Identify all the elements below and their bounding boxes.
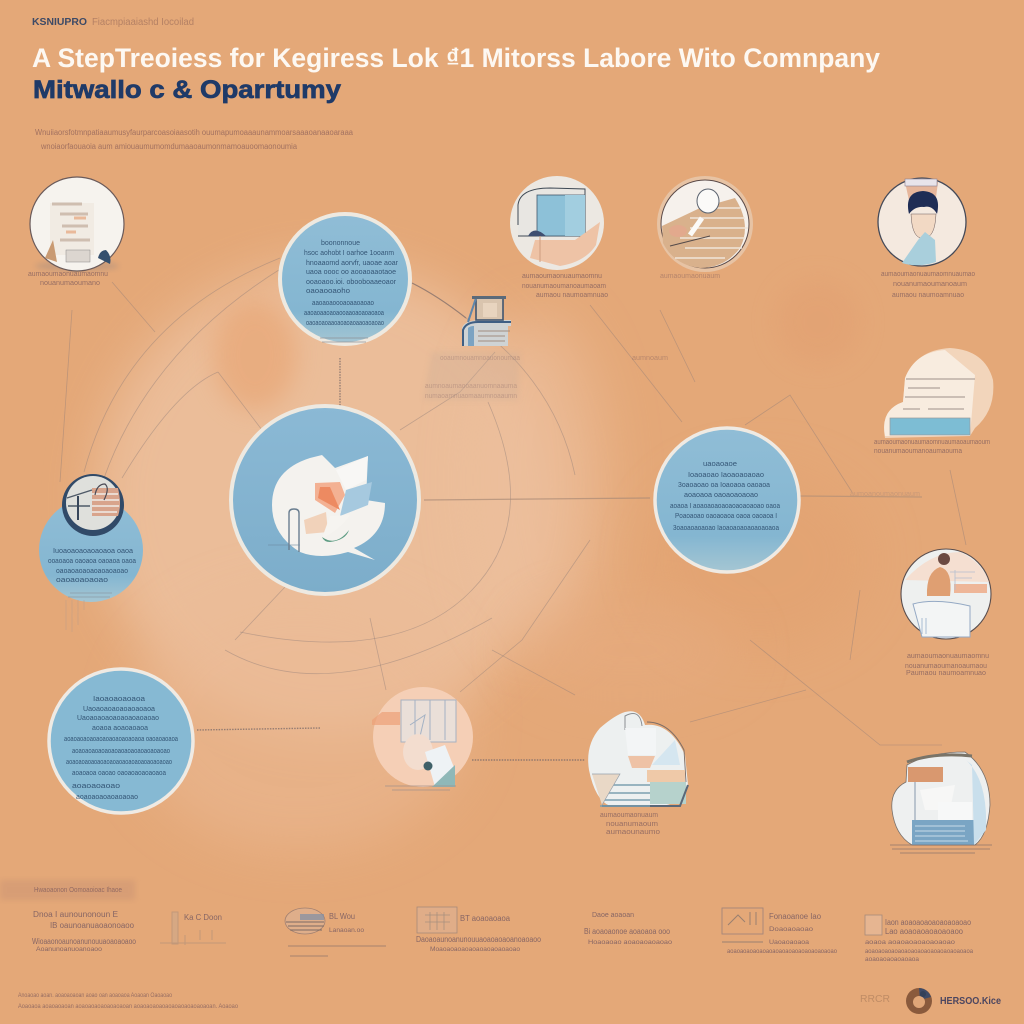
footer: brand logo <box>860 988 1001 1014</box>
icon: document with blue bar <box>884 348 993 438</box>
panel: lower-left text circle: aoaoaoa oaoao oaoaoaoaoaoaoa <box>72 770 166 777</box>
floating faint annotation text: numaoamnuaomaaumnoaaumn <box>425 393 517 400</box>
node caption: nouanumaoumano <box>40 280 100 287</box>
panel: monitor node <box>510 176 608 299</box>
caption: nouanumaoum <box>606 821 658 828</box>
icon: machine <box>462 296 511 346</box>
icon: abstract speech shape <box>268 455 385 560</box>
caption: nouanumaoumanoaumaoam <box>522 283 606 290</box>
panel: right text circle: uaoaoaoe <box>703 461 737 468</box>
caption <box>874 439 990 455</box>
panel: top text circle: hsoc aohobt I oarhoe 1ooanm <box>304 250 394 257</box>
floating faint annotation text: ooaumnouamnoauonoumaa <box>440 355 520 362</box>
footer: item 3: BL Wou <box>329 912 355 921</box>
title: A StepTreoiess for Kegiress Lok ₫1 Mitorss Labore Wito Comnpany <box>32 43 880 73</box>
footer: item 1: Dnoa I aunounonoun E <box>33 910 118 919</box>
panel: lower-left text circle: Uaoaoaoaoaoaoaoaoa <box>83 706 155 713</box>
icon: chart post <box>160 912 226 945</box>
footer: item 7: aoaoaoaoaoaoaoaoaoaoaoaoaoaoaoaoa <box>865 949 974 955</box>
panel: top text circle: boononnoue <box>321 240 360 247</box>
panel: top text circle: oaoaoaoaaoaoaoaoaaoaoaoao <box>306 320 384 327</box>
icon: portrait <box>878 178 966 266</box>
caption: aumaou naumoamnuao <box>892 292 964 299</box>
eyebrow label: Fiacmpiaaiashd Iocoilad <box>92 17 194 28</box>
caption: aumaoumaonuaumaomnu <box>522 273 602 280</box>
panel: left lock node with text circle: oaoaoaoaoaoaoaoaoao <box>56 568 128 575</box>
icon: globe stack <box>285 908 325 934</box>
footer: item 7: Lao aoaoaoaoaoaoaoo <box>885 927 964 936</box>
intro text: wnoiaorfaouaoia aum amiouaumumomdumaaoaumonmamoauoomaonoumia <box>40 142 298 151</box>
caption: nouanumaoumanoaum <box>893 281 967 288</box>
footer: item 4: BT aoaoaoaoa <box>460 914 511 923</box>
footer: item 1 <box>32 910 136 953</box>
caption: aumaoumaonuaumaomnu <box>907 653 989 660</box>
panel: lower-left text circle: aoaoaoaoaoaoaoaoaoaoaoaoa oaoaoaoaoa <box>64 736 178 743</box>
footer: item 6 <box>722 908 838 955</box>
panel: top-left illustrated node <box>28 177 124 287</box>
subtitle: Mitwallo c & Oparrtumy <box>33 76 341 104</box>
caption: aumaounaumo <box>606 829 660 836</box>
caption <box>905 653 989 677</box>
icon: sketched figure <box>657 176 753 272</box>
footer: item 4: Daoaoaunoanunouuaoaoaoaoanoaoaoo <box>416 935 541 944</box>
footer: item 5 <box>584 912 673 946</box>
caption <box>600 812 660 836</box>
caption: aumaoumaonuaum <box>600 812 658 819</box>
caption: Paumaou naumoamnuao <box>906 670 986 677</box>
footer: item 7: Iaon aoaoaoaoaoaoaoaoao <box>885 918 971 927</box>
panel: bottom-left-center reader node <box>372 687 473 790</box>
footer: brand logo: HERSOO.Kice <box>940 996 1001 1007</box>
footer: item 6: Uaoaoaoaoa <box>769 940 810 946</box>
background wash shapes <box>95 265 870 850</box>
icon: ship in frame <box>892 752 990 845</box>
caption <box>890 845 992 853</box>
footer: item 6: Fonaoanoe Iao <box>769 912 822 921</box>
panel: central hub <box>231 406 419 594</box>
footer: brand logo: RRCR <box>860 994 890 1005</box>
footer: item 1: IB oaunoanuaoaonoaoo <box>50 921 135 930</box>
footer: item 4 <box>416 907 541 953</box>
panel: bottom-center stacked node <box>588 711 688 836</box>
icon: monitor <box>510 176 604 270</box>
footer: item 1: Wioaaonoaunoanunouuaoaoaoaoo <box>32 937 136 946</box>
footer notes <box>18 993 239 1010</box>
panel: right text circle: 3oaoaoaoaoao Iaoaoaoaoaoaoaoaoa <box>673 525 779 532</box>
panel: right text circle <box>655 428 799 572</box>
panel: top text circle: aaoaoaaoaoaooaaoaoaoaoaoa <box>304 310 384 317</box>
floating faint annotation text: aumnoaumaooaanuomnaauma <box>425 383 517 390</box>
panel: lower-left text circle <box>49 669 193 813</box>
footer: item 5: Hoaoaoao aoaoaoaoaoao <box>588 940 673 946</box>
footer: item 7: aoaoa aoaoaoaoaoaoaoao <box>865 940 956 946</box>
panel: left lock node with text circle: oaoaoaoaoao <box>56 577 108 584</box>
panel: top text circle: oaoaooaoho <box>306 288 350 295</box>
connector lines <box>60 258 966 760</box>
icon: brand mark <box>906 988 932 1014</box>
footer: item 3 <box>285 908 386 956</box>
footer: item 2 <box>160 912 226 945</box>
caption: aumaoumaonuaum <box>660 273 720 280</box>
panel: right text circle: aoaoa I aoaoaoaoaoaoaoaoaoao oaoa <box>670 503 780 510</box>
panel: small machine icon <box>424 296 520 400</box>
panel: top text circle: aaoaoaoooaoaaoaoao <box>312 300 374 307</box>
panel: lower-left text circle: aoaoaoaoao <box>72 783 120 790</box>
panel: left lock node with text circle <box>39 474 143 632</box>
panel: lower-left text circle: aoaoa aoaoaoaoa <box>92 725 148 732</box>
icon: small chart frame <box>722 908 763 942</box>
icon: pile of books and monitor <box>588 711 688 806</box>
footer: item 7: aoaoaoaoaoaoaoa <box>865 957 920 963</box>
panel: lower-left text circle: aoaoaoaoaoaoaoao <box>76 794 138 801</box>
caption: nouanumaoumanoaumaouma <box>874 448 962 455</box>
footer: item 5: Bi aoaoaonoe aoaoaoa ooo <box>584 927 670 936</box>
panel: right text circle: Ioaoaoao Iaoaoaoaoao <box>688 472 764 479</box>
caption: nouanumaoumanoaumaou <box>905 663 987 670</box>
panel: top text circle: ooaoaoo.ioi. obooboaaeoaor <box>306 279 397 286</box>
footer: section label band: Hwaoaonon Oomoaoioac Ihaoe <box>34 885 122 894</box>
footer notes: Anoaoao aoan. aoaoaoaoan aoao oan aoaoaoa Aoaoan Oaoaoao <box>18 993 173 999</box>
intro text: Wnuiiaorsfotmnpatiaaumusyfaurparcoasoiaasotih ouumapumoaaaunammoarsaaaoanaaoaraaa <box>35 128 354 137</box>
caption <box>424 352 520 400</box>
footer notes: Aoaoaoa aoaoaoaoan aoaoaoaoaoaoaoaoan aoaoaoaoaoaoaoaoaoaoaoaoan. Aoaoao <box>18 1004 239 1010</box>
node caption: aumaoumaonuaumaomnu <box>28 271 108 278</box>
footer: item 6: Doaoaoaoao <box>769 927 814 933</box>
icon: lock <box>62 474 124 536</box>
caption <box>881 271 975 299</box>
panel: lower-left text circle: aoaoaoaoaoaoaoaoaoaoaoaoaoaoao <box>72 748 170 755</box>
floating faint annotation text: aumnoaum <box>632 355 668 362</box>
panel: person at desk node <box>901 549 991 677</box>
footer: item 1: Aoanunoanuoanoaoo <box>36 947 103 953</box>
panel: top text circle: uaoa oooc oo aooaoaaotaoe <box>306 269 396 276</box>
footer: item 3: Lanaoan.oo <box>329 927 364 934</box>
footer: item 2: Ka C Doon <box>184 913 222 922</box>
footer: item 6: aoaoaoaoaoaoaoaoaoaoaoaoaoaoaoaoao <box>727 949 838 955</box>
caption: aumaoumaonuaumaomnuaumaoaumaoum <box>874 439 990 446</box>
footer: item 5: Daoe aoaoan <box>592 912 634 919</box>
footer: section label band <box>0 880 135 900</box>
floating faint annotation text <box>425 355 920 498</box>
footer: item 4: Moaoaoaoaoaoaoaoaoaoaoao <box>430 947 521 953</box>
panel: bottom-right ship node <box>890 752 992 853</box>
icon: person by window <box>372 687 473 790</box>
eyebrow label: KSNIUPRO <box>32 17 87 28</box>
panel: lower-left text circle: Uaoaoaoaoaoaoaoaoaoao <box>77 715 159 722</box>
intro text <box>35 128 354 151</box>
icon: framed panel <box>417 907 457 933</box>
panel: lower-left text circle: Iaoaoaoaoaoa <box>93 696 145 703</box>
panel: sketch figure node <box>657 176 753 280</box>
floating faint annotation text: aumoanoumaonuaum <box>850 491 920 498</box>
panel: lower-left text circle: aoaoaoaoaoaoaoaoaoaoaoaoaoaoaoaoao <box>66 759 172 766</box>
panel: document node <box>874 348 993 455</box>
panel: right text circle: 3oaoaoao oa Ioaoaoa oaoaoa <box>678 482 770 489</box>
panel: top text circle: hnoaaomd aorvfr, uaoae aoar <box>306 260 399 267</box>
icon: page <box>865 915 882 935</box>
panel: portrait node <box>878 178 975 299</box>
node caption <box>28 271 108 287</box>
eyebrow label <box>32 17 194 28</box>
footer: item 7 <box>865 915 974 963</box>
panel: right text circle: aoaoaoa oaoaoaoaoao <box>684 492 758 499</box>
panel: left lock node with text circle: ooaoaoa oaoaoa oaoaoa oaoa <box>48 558 136 565</box>
panel: left lock node with text circle: Iuoaoaoaoaoaoaoa oaoa <box>53 548 133 555</box>
caption: aumaou naumoamnuao <box>536 292 608 299</box>
icon: document desk <box>30 177 124 271</box>
panel: top text circle <box>280 214 410 344</box>
caption: aumaoumaonuaumaomnuaumao <box>881 271 975 278</box>
caption <box>522 273 608 299</box>
panel: right text circle: Poaoaoao oaoaoaoa oaoa oaoaoa I <box>675 513 777 520</box>
icon: person at desk <box>901 549 991 639</box>
